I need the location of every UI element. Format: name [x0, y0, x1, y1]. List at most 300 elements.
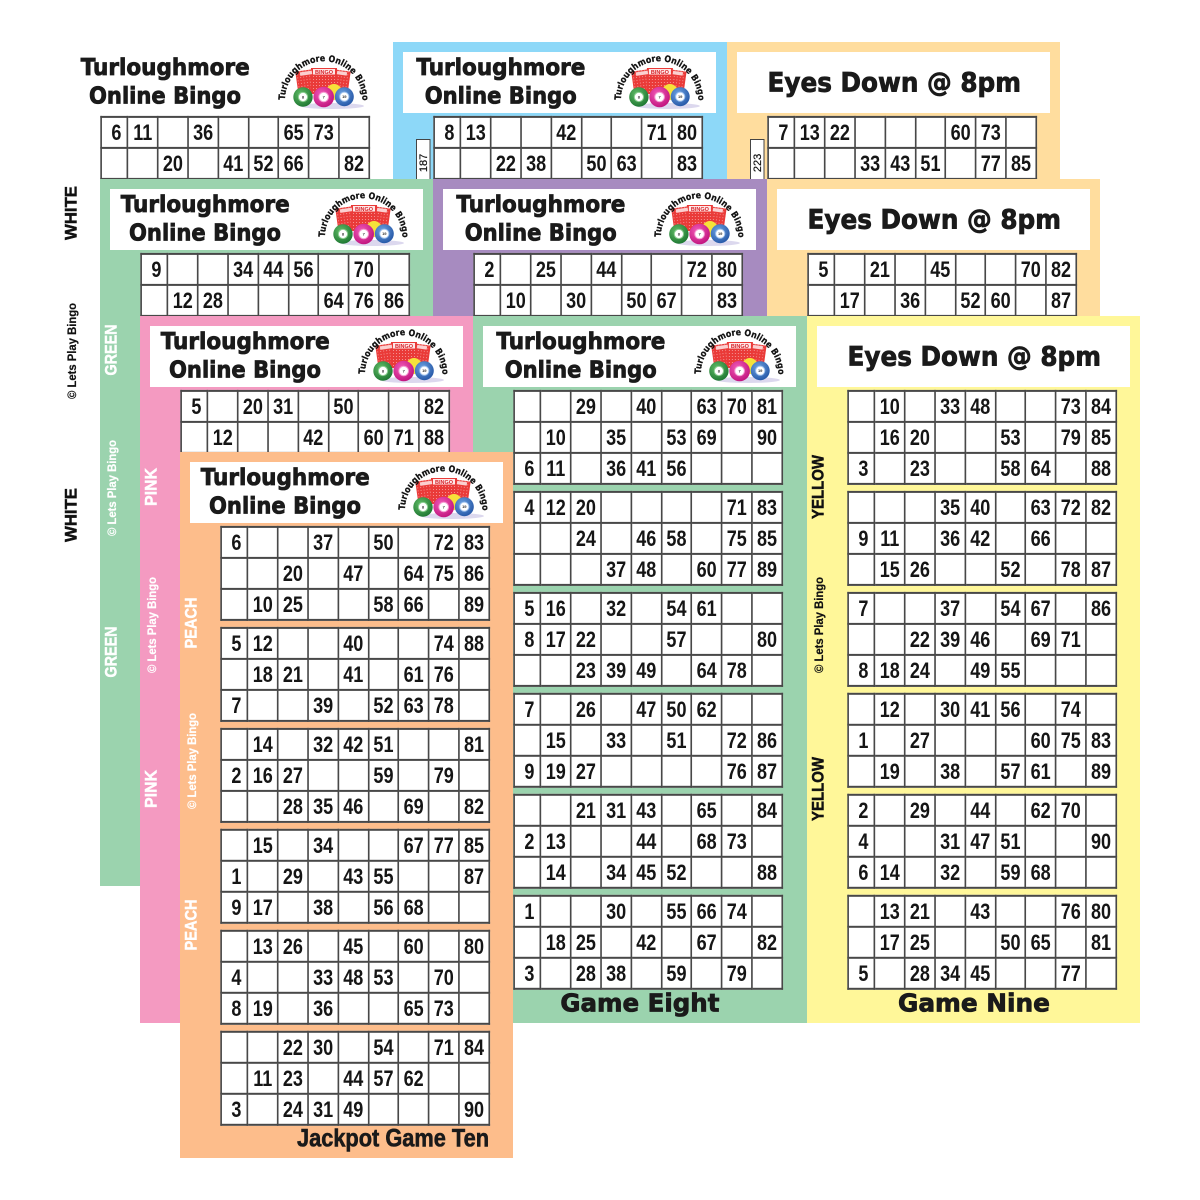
bingo ticket 1: 37 [313, 529, 333, 554]
bingo ticket: 71 [647, 119, 667, 144]
bingo ticket 3: 14 [253, 731, 273, 756]
bingo ticket 6: 84 [464, 1034, 484, 1059]
bingo ticket 4: 30 [940, 696, 960, 721]
bingo ticket 4: 62 [697, 696, 717, 721]
bingo ticket: 42 [557, 119, 577, 144]
bingo ticket: 51 [920, 150, 940, 175]
bingo ticket 2: 11 [880, 525, 899, 550]
bingo ticket 2: 40 [343, 630, 363, 655]
bingo ticket 1: 10 [879, 393, 899, 418]
bingo ticket 3: 39 [606, 657, 626, 682]
bingo ticket 1: 50 [373, 529, 393, 554]
header: Turloughmore Online Bingo: Turloughmore [497, 329, 666, 355]
bingo ticket [434, 116, 703, 180]
header: Turloughmore Online Bingo: Turloughmore [81, 55, 250, 81]
bingo ticket 4: 55 [373, 863, 393, 888]
bingo ticket 6: 59 [667, 960, 687, 985]
bingo ticket: 67 [657, 287, 677, 312]
bingo ticket 1: 40 [637, 393, 657, 418]
bingo ticket 6: 50 [1000, 929, 1020, 954]
bingo ticket 5: 73 [434, 995, 454, 1020]
bingo ticket 2: 12 [253, 630, 273, 655]
bingo ticket: 70 [354, 256, 374, 281]
bingo ticket 4: 26 [576, 696, 596, 721]
panel: pink sheet [140, 316, 473, 1023]
bingo ticket 2: 9 [858, 525, 868, 550]
bingo ticket 4: 86 [757, 727, 777, 752]
bingo ticket 1: 35 [606, 424, 626, 449]
bingo ticket 2: 46 [637, 525, 657, 550]
bingo ticket 1: 75 [434, 560, 454, 585]
bingo ticket: 36 [900, 287, 920, 312]
bingo ticket 6: 34 [940, 960, 960, 985]
bingo ticket: 13 [799, 119, 819, 144]
bingo ticket 2: 40 [970, 494, 990, 519]
bingo ticket 5: 21 [576, 797, 596, 822]
bingo ticket 5: 65 [697, 797, 717, 822]
bingo ticket: 9 [151, 256, 161, 281]
bingo ticket 3: 86 [1091, 595, 1111, 620]
bingo ticket 1: 70 [727, 393, 747, 418]
bingo ticket 5: 51 [1000, 828, 1020, 853]
bingo ticket 2 [847, 491, 1117, 586]
footer: Game Eight: Game Eight [561, 989, 720, 1018]
bingo ticket 4: 85 [464, 832, 484, 857]
bingo ticket 3: 35 [313, 793, 333, 818]
bingo ticket: 2 [485, 256, 495, 281]
bingo ticket 3: 27 [283, 762, 303, 787]
bingo ticket 1: 23 [910, 455, 930, 480]
bingo ticket 1: 58 [1000, 455, 1020, 480]
bingo ticket 6: 23 [283, 1065, 303, 1090]
bingo ticket: 60 [950, 119, 970, 144]
bingo ticket 3: 78 [727, 657, 747, 682]
bingo ticket 5: 70 [434, 964, 454, 989]
bingo ticket: 77 [980, 150, 1001, 175]
bingo ticket 4: 61 [1030, 758, 1050, 783]
bingo ticket 1: 64 [404, 560, 424, 585]
bingo ticket 2: 15 [879, 556, 899, 581]
bingo ticket 2: 18 [253, 661, 273, 686]
bingo ticket: 5 [191, 393, 201, 418]
bingo ticket: 44 [263, 256, 283, 281]
bingo ticket 4: 50 [667, 696, 687, 721]
bingo ticket 3: 79 [434, 762, 454, 787]
bingo ticket: 72 [687, 256, 707, 281]
bingo ticket 1: 33 [940, 393, 960, 418]
icon: bingo logo: 8 [382, 368, 385, 374]
bingo ticket 5: 13 [546, 828, 566, 853]
panel: white sheet [60, 42, 393, 749]
bingo ticket 4: 77 [434, 832, 454, 857]
bingo ticket 3: 69 [1030, 626, 1050, 651]
bingo ticket: 20 [163, 150, 183, 175]
bingo ticket: 82 [424, 393, 444, 418]
bingo ticket 2: 60 [697, 556, 717, 581]
bingo ticket: 65 [284, 119, 304, 144]
bingo ticket 3: 81 [464, 731, 484, 756]
icon: bingo logo: BINGO [435, 480, 454, 486]
bingo ticket 6: 77 [1060, 960, 1081, 985]
icon: bingo logo: 7 [659, 94, 662, 100]
icon: bingo logo: 7 [403, 368, 406, 374]
bingo ticket 6: 17 [879, 929, 899, 954]
bingo ticket 6: 31 [313, 1096, 333, 1121]
header: Turloughmore Online Bingo: Online Bingo [129, 221, 281, 247]
bingo ticket 2: 78 [1060, 556, 1081, 581]
bingo ticket 4: 89 [1091, 758, 1111, 783]
bingo ticket: 85 [1011, 150, 1031, 175]
bingo ticket 4: 17 [253, 894, 273, 919]
bingo ticket 3: 23 [576, 657, 596, 682]
bingo ticket 5 [847, 794, 1117, 889]
bingo ticket: 36 [193, 119, 213, 144]
bingo ticket 5: 4 [858, 828, 868, 853]
bingo ticket: 34 [233, 256, 253, 281]
header: Eyes Down at 8pm [737, 52, 1050, 113]
bingo ticket: 80 [677, 119, 697, 144]
bingo ticket 5: 53 [373, 964, 393, 989]
bingo ticket 5: 84 [757, 797, 777, 822]
bingo ticket 5: 45 [343, 933, 363, 958]
bingo ticket 3: 61 [697, 595, 717, 620]
bingo ticket 6: 45 [970, 960, 990, 985]
bingo ticket 4: 29 [283, 863, 303, 888]
bingo ticket 6: 22 [283, 1034, 303, 1059]
footer: Jackpot Game Ten: Jackpot Game Ten [297, 1125, 489, 1153]
bingo ticket 3: 49 [637, 657, 657, 682]
bingo ticket 5: 6 [858, 859, 868, 884]
bingo ticket [140, 253, 410, 317]
bingo ticket 2: 61 [404, 661, 424, 686]
bingo ticket 2: 26 [910, 556, 930, 581]
bingo ticket 5: 43 [637, 797, 657, 822]
bingo ticket 2: 66 [1030, 525, 1050, 550]
header: Turloughmore Online Bingo: Turloughmore [201, 465, 370, 491]
bingo ticket 4: 7 [525, 696, 535, 721]
bingo ticket 6: 62 [404, 1065, 424, 1090]
bingo ticket 4: 19 [879, 758, 899, 783]
bingo ticket 3 [220, 728, 490, 823]
header: Eyes Down at 8pm: Eyes Down @ 8pm [847, 342, 1101, 373]
bingo ticket 4: 87 [464, 863, 484, 888]
icon: bingo logo: 19 [758, 368, 764, 373]
bingo ticket 1: 64 [1030, 455, 1050, 480]
bingo ticket 6: 80 [1091, 898, 1111, 923]
panel: yellow sheet Game Nine [807, 316, 1140, 1023]
bingo ticket 1: 73 [1060, 393, 1081, 418]
bingo ticket 5: 70 [1060, 797, 1081, 822]
bingo ticket 4: 41 [970, 696, 990, 721]
bingo ticket 4: 57 [1000, 758, 1020, 783]
bingo ticket 3: 46 [343, 793, 363, 818]
icon: bingo logo: 19 [342, 94, 347, 99]
bingo ticket 6: 30 [313, 1034, 333, 1059]
bingo ticket 1 [847, 390, 1117, 485]
bingo ticket 3 [514, 592, 783, 687]
bingo ticket 6: 21 [910, 898, 930, 923]
bingo ticket 3: 5 [525, 595, 535, 620]
bingo ticket 2: 74 [434, 630, 454, 655]
header: Turloughmore Online Bingo: Online Bingo [505, 358, 657, 384]
bingo ticket 2: 48 [637, 556, 657, 581]
icon: bingo logo: 8 [718, 368, 721, 374]
side label: WHITE: WHITE [62, 186, 81, 240]
bingo ticket 4: 1 [231, 863, 241, 888]
icon: bingo logo: BINGO [395, 344, 414, 350]
bingo ticket 6: 18 [546, 929, 566, 954]
panel: peach sheet Jackpot Game Ten [180, 452, 513, 1158]
bingo ticket: 33 [860, 150, 880, 175]
header: Turloughmore Online Bingo [190, 462, 503, 523]
bingo ticket 3: 39 [940, 626, 960, 651]
bingo ticket 2: 75 [727, 525, 747, 550]
side label: WHITE lower: WHITE [62, 488, 81, 542]
bingo ticket: 50 [587, 150, 607, 175]
bingo ticket 1: 36 [606, 455, 626, 480]
side label: PINK lower: PINK [142, 769, 161, 808]
icon: bingo logo: 8 [342, 232, 345, 236]
bingo ticket 3: 8 [858, 657, 868, 682]
serial number box: 223 [752, 154, 764, 172]
header: Turloughmore Online Bingo: Online Bingo [209, 494, 361, 520]
panel: green sheet Game Eight [473, 316, 807, 1023]
icon: bingo logo: 7 [363, 232, 366, 236]
bingo ticket 5: 60 [404, 933, 424, 958]
bingo ticket: 82 [344, 150, 364, 175]
bingo ticket 1: 69 [697, 424, 717, 449]
bingo ticket 5: 44 [970, 797, 990, 822]
bingo ticket 3: 51 [373, 731, 393, 756]
bingo ticket 3: 69 [404, 793, 424, 818]
bingo ticket: 17 [839, 287, 859, 312]
header: Turloughmore Online Bingo [443, 189, 756, 250]
bingo ticket 4: 75 [1060, 727, 1081, 752]
bingo ticket 4: 76 [727, 758, 747, 783]
bingo ticket 3: 22 [576, 626, 596, 651]
bingo ticket 6: 43 [970, 898, 990, 923]
header: Eyes Down at 8pm [817, 326, 1130, 387]
bingo ticket 6: 1 [525, 898, 535, 923]
bingo ticket 4: 74 [1060, 696, 1081, 721]
bingo ticket 2 [514, 491, 783, 586]
side label: PINK: PINK [142, 467, 161, 506]
bingo ticket 1: 58 [373, 591, 393, 616]
bingo ticket 2: 63 [404, 692, 424, 717]
bingo ticket 4: 19 [546, 758, 566, 783]
bingo ticket 1: 90 [757, 424, 777, 449]
bingo ticket 3: 28 [283, 793, 303, 818]
bingo ticket: 56 [293, 256, 313, 281]
bingo ticket 4: 27 [910, 727, 930, 752]
bingo ticket 6: 90 [464, 1096, 484, 1121]
bingo ticket 4: 47 [637, 696, 657, 721]
bingo ticket: 42 [303, 424, 323, 449]
bingo ticket 2 [220, 627, 490, 722]
bingo ticket 5 [220, 930, 490, 1025]
bingo ticket 1: 25 [283, 591, 303, 616]
bingo ticket 6: 42 [637, 929, 657, 954]
bingo ticket 2: 20 [576, 494, 596, 519]
bingo ticket 2: 87 [1091, 556, 1111, 581]
bingo ticket 5: 14 [546, 859, 566, 884]
bingo ticket 6: 76 [1060, 898, 1081, 923]
side label: YELLOW lower: YELLOW [808, 756, 827, 821]
bingo ticket 6: 82 [757, 929, 777, 954]
copyright: © Lets Play Bingo [107, 440, 119, 536]
bingo ticket 2: 83 [757, 494, 777, 519]
bingo ticket 1: 16 [879, 424, 899, 449]
bingo ticket [767, 116, 1037, 180]
bingo ticket 4: 83 [1091, 727, 1111, 752]
bingo ticket 4 [514, 693, 783, 788]
bingo ticket 2: 76 [434, 661, 454, 686]
icon: bingo logo: 7 [323, 94, 326, 100]
bingo ticket 4: 67 [404, 832, 424, 857]
header: Turloughmore Online Bingo: Turloughmore [161, 329, 330, 355]
bingo ticket 1: 85 [1091, 424, 1111, 449]
bingo ticket 1: 6 [525, 455, 535, 480]
bingo ticket 6: 44 [343, 1065, 363, 1090]
icon: bingo logo: 19 [462, 504, 467, 509]
bingo ticket 4: 12 [879, 696, 899, 721]
icon: bingo logo: 19 [678, 94, 684, 99]
bingo ticket: 45 [930, 256, 950, 281]
bingo ticket: 13 [466, 119, 486, 144]
bingo ticket 4: 15 [253, 832, 273, 857]
bingo ticket 4 [847, 693, 1117, 788]
bingo ticket 1: 6 [231, 529, 241, 554]
side label: PEACH: PEACH [182, 598, 201, 648]
header: Eyes Down at 8pm: Eyes Down @ 8pm [767, 68, 1021, 99]
bingo ticket 6: 25 [576, 929, 596, 954]
icon: bingo logo: Turloughmore Online Bingo [318, 192, 408, 238]
icon: bingo logo: BINGO [731, 344, 750, 350]
bingo ticket: 82 [1051, 256, 1071, 281]
header: Turloughmore Online Bingo: Turloughmore [121, 192, 290, 218]
bingo ticket 3: 80 [757, 626, 777, 651]
bingo ticket 2: 58 [667, 525, 687, 550]
icon: bingo logo: 7 [699, 232, 702, 236]
bingo ticket 6: 28 [910, 960, 930, 985]
icon: bingo logo: Turloughmore Online Bingo [614, 55, 704, 100]
bingo ticket 6: 11 [253, 1065, 272, 1090]
bingo ticket: 28 [203, 287, 223, 312]
bingo ticket: 41 [223, 150, 243, 175]
icon: bingo logo: Turloughmore Online Bingo [694, 329, 784, 374]
bingo ticket 1: 11 [547, 455, 566, 480]
bingo ticket: 11 [133, 119, 152, 144]
bingo ticket: 52 [253, 150, 273, 175]
bingo ticket [100, 116, 370, 180]
header: Turloughmore Online Bingo: Turloughmore [417, 55, 586, 81]
bingo ticket 3: 16 [546, 595, 566, 620]
bingo ticket: 10 [506, 287, 526, 312]
panel: blue sheet [393, 42, 727, 749]
bingo ticket 2: 78 [434, 692, 454, 717]
bingo ticket 3: 54 [1000, 595, 1020, 620]
bingo ticket: 21 [870, 256, 890, 281]
bingo ticket 1: 53 [667, 424, 687, 449]
bingo ticket 5: 59 [1000, 859, 1020, 884]
bingo ticket 5 [514, 794, 783, 889]
bingo ticket 5: 44 [637, 828, 657, 853]
header: Turloughmore Online Bingo [403, 52, 716, 113]
bingo ticket 6 [220, 1031, 490, 1126]
bingo ticket 1: 89 [464, 591, 484, 616]
icon: bingo logo: 7 [443, 504, 446, 510]
bingo ticket 5: 32 [940, 859, 960, 884]
bingo ticket 4: 34 [313, 832, 333, 857]
bingo ticket: 73 [314, 119, 334, 144]
bingo ticket: 22 [496, 150, 516, 175]
bingo ticket 2: 52 [373, 692, 393, 717]
bingo ticket 3: 18 [879, 657, 899, 682]
bingo ticket 3: 46 [970, 626, 990, 651]
bingo ticket: 83 [677, 150, 697, 175]
bingo ticket: 88 [424, 424, 444, 449]
bingo ticket 6: 38 [606, 960, 626, 985]
bingo ticket 6: 54 [373, 1034, 393, 1059]
bingo ticket: 6 [111, 119, 121, 144]
bingo ticket 1: 20 [283, 560, 303, 585]
bingo ticket 4: 9 [525, 758, 535, 783]
bingo ticket: 30 [566, 287, 586, 312]
bingo ticket 2: 5 [231, 630, 241, 655]
icon: bingo logo: BINGO [315, 70, 334, 76]
bingo ticket 4: 56 [373, 894, 393, 919]
bingo ticket 1: 41 [637, 455, 657, 480]
bingo ticket 4: 27 [576, 758, 596, 783]
bingo ticket 6: 67 [697, 929, 717, 954]
bingo ticket 3: 64 [697, 657, 717, 682]
bingo ticket 5: 33 [313, 964, 333, 989]
bingo ticket 2: 71 [727, 494, 747, 519]
header: Turloughmore Online Bingo: Turloughmore [457, 192, 626, 218]
bingo ticket 6: 13 [879, 898, 899, 923]
bingo ticket 2: 88 [464, 630, 484, 655]
icon: bingo logo: 8 [422, 504, 425, 510]
bingo ticket: 50 [333, 393, 353, 418]
bingo ticket: 44 [597, 256, 617, 281]
bingo ticket 4 [220, 829, 490, 924]
bingo ticket 6: 81 [1091, 929, 1111, 954]
bingo ticket: 83 [717, 287, 737, 312]
bingo ticket 2: 82 [1091, 494, 1111, 519]
bingo ticket 4: 9 [231, 894, 241, 919]
bingo ticket 3: 67 [1030, 595, 1050, 620]
bingo ticket 2: 4 [525, 494, 535, 519]
bingo ticket: 38 [526, 150, 546, 175]
bingo ticket 5: 68 [697, 828, 717, 853]
bingo ticket 5: 80 [464, 933, 484, 958]
bingo ticket 6: 66 [697, 898, 717, 923]
panel: cream sheet middle [767, 179, 1100, 886]
bingo ticket 1: 79 [1060, 424, 1081, 449]
bingo ticket 3: 55 [1000, 657, 1020, 682]
bingo ticket 5: 88 [757, 859, 777, 884]
bingo ticket 3: 57 [667, 626, 687, 651]
bingo ticket 5: 73 [727, 828, 747, 853]
bingo ticket [180, 390, 450, 454]
bingo ticket 5: 14 [879, 859, 899, 884]
bingo ticket: 60 [364, 424, 384, 449]
bingo ticket 3: 16 [253, 762, 273, 787]
icon: bingo logo: Turloughmore Online Bingo [358, 329, 448, 374]
bingo ticket 2: 24 [576, 525, 596, 550]
bingo ticket 3: 8 [525, 626, 535, 651]
header: Turloughmore Online Bingo [110, 189, 423, 250]
